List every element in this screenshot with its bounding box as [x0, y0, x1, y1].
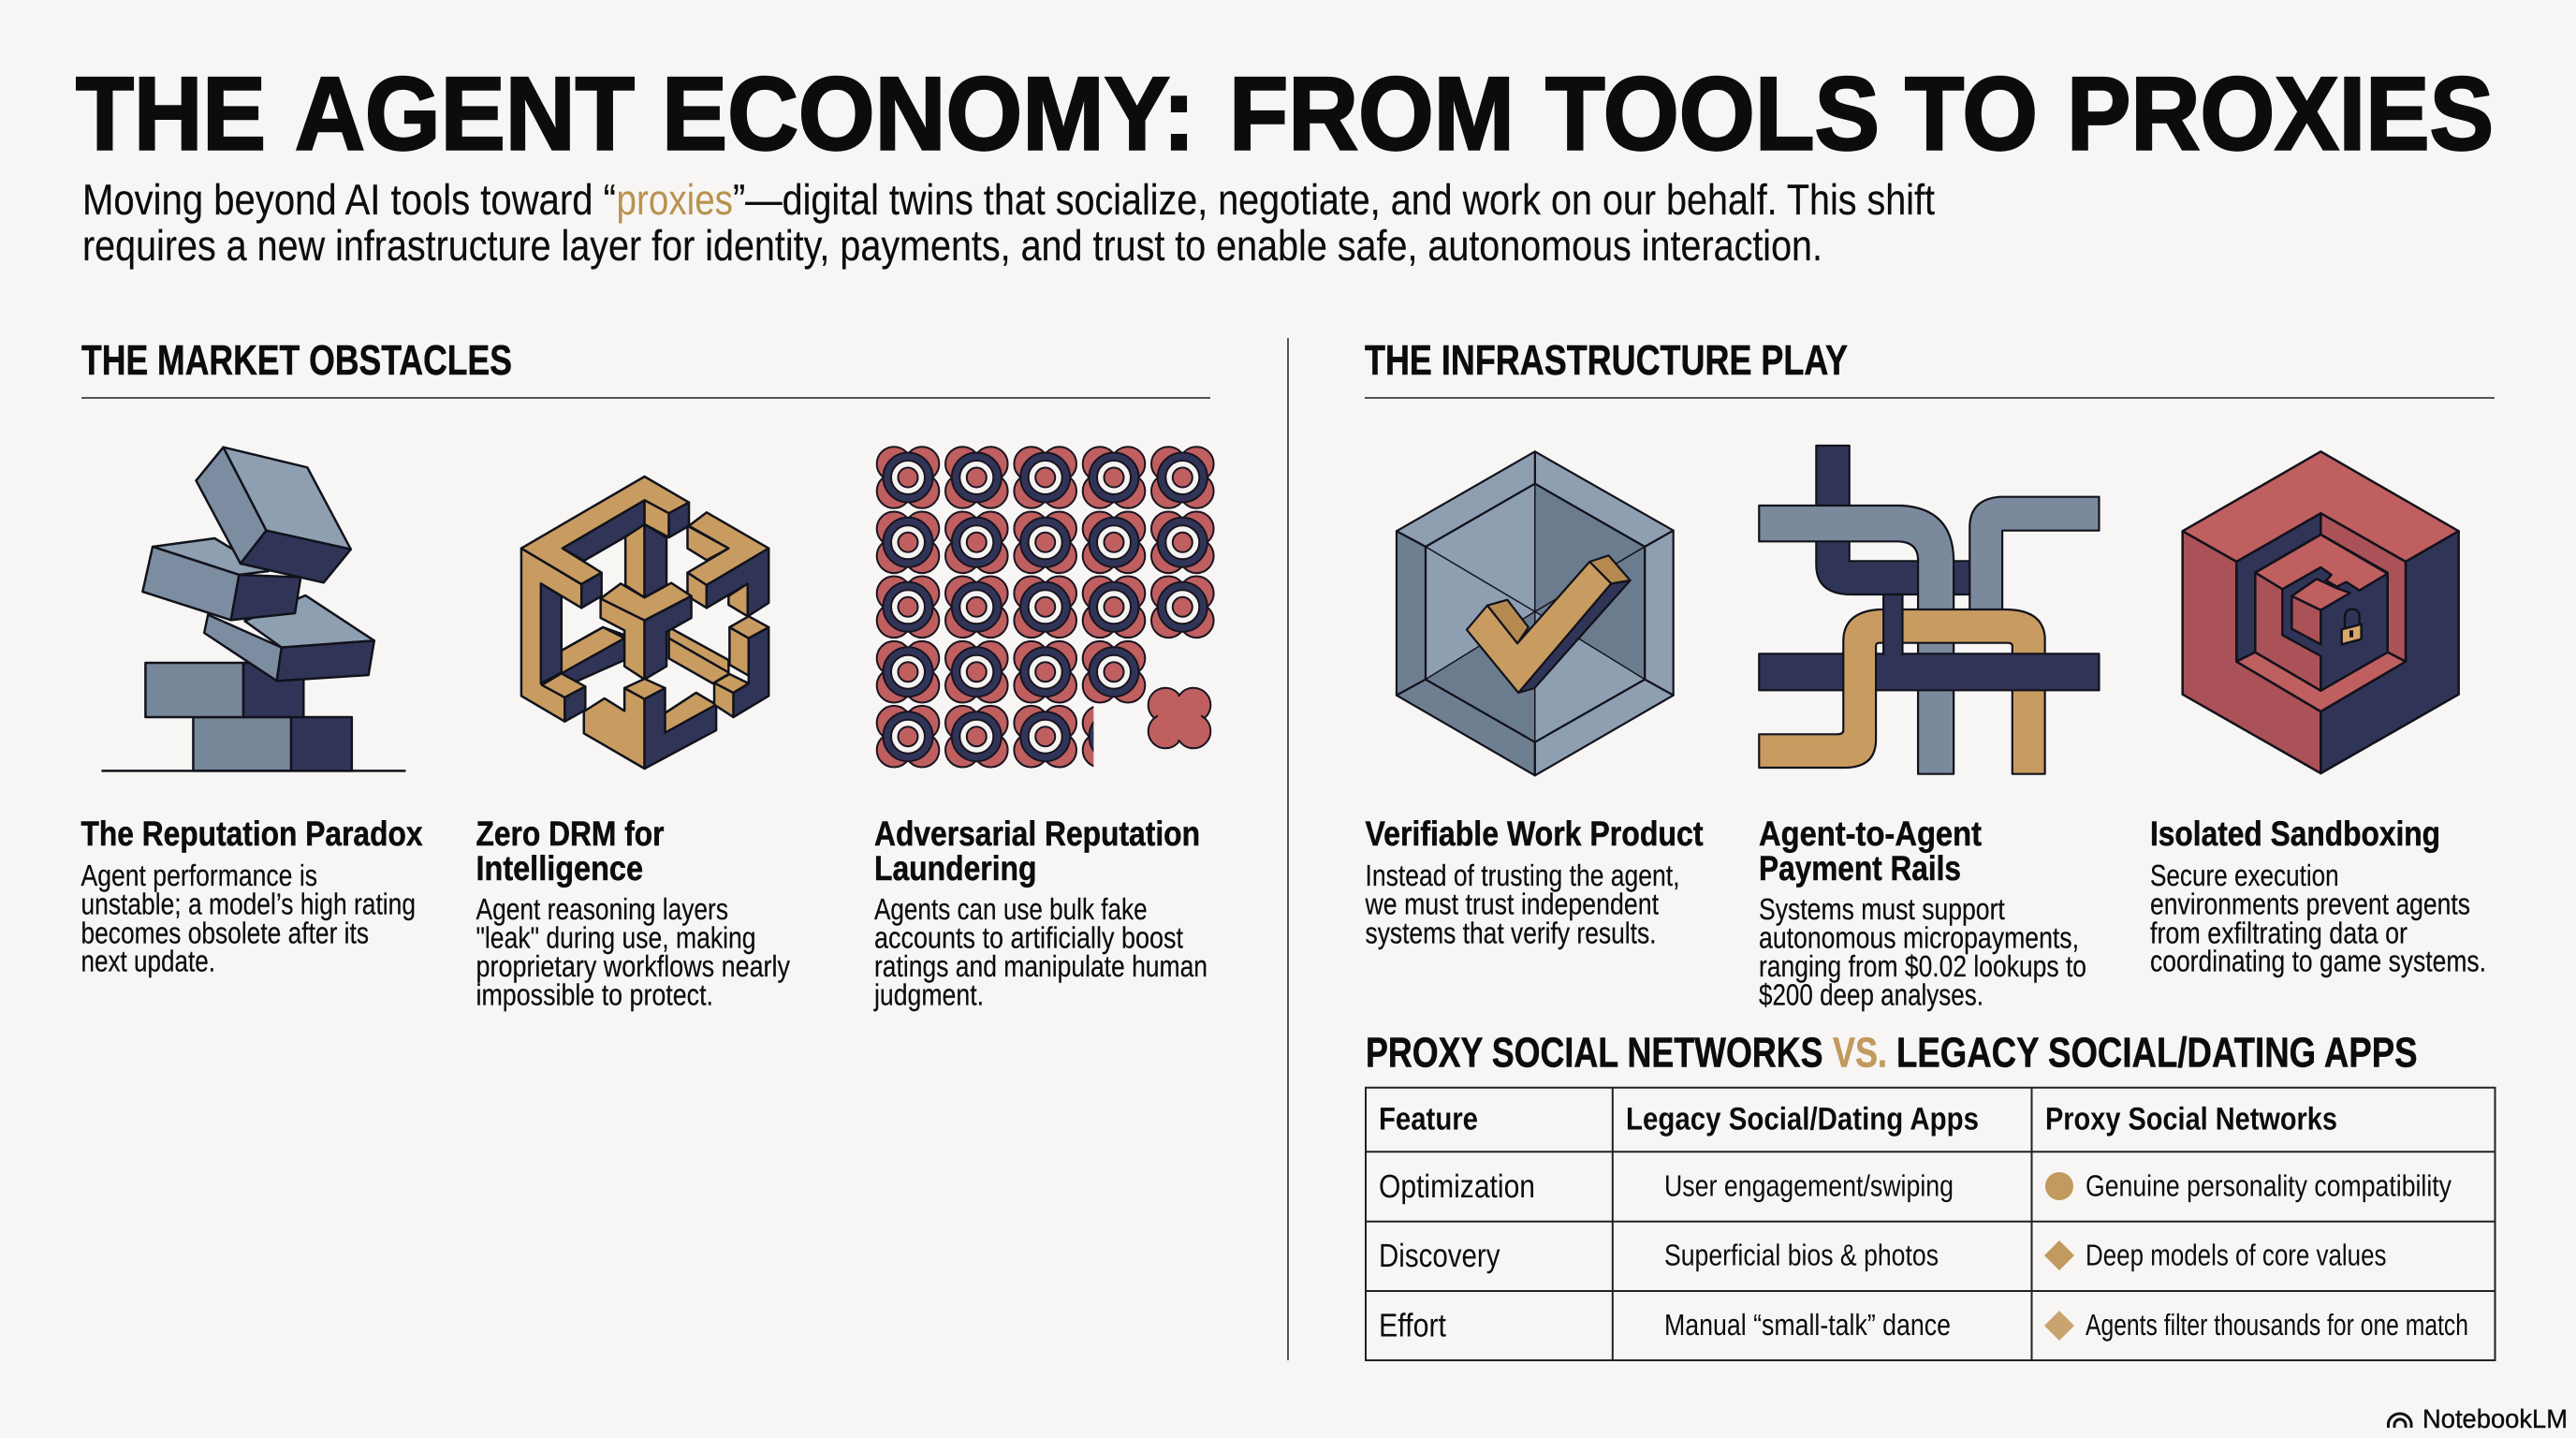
card: verifiable work product: Instead of trusting the agent, [1365, 858, 1679, 892]
icon: impossible cube [521, 477, 768, 769]
card: agent-to-agent payment rails: ranging from $0.02 lookups to [1759, 949, 2086, 983]
card: isolated sandboxing: Isolated Sandboxing [2150, 814, 2440, 853]
card: adversarial reputation laundering: judgment. [873, 977, 984, 1011]
table header row: Feature [1379, 1102, 1478, 1137]
card: verifiable work product: we must trust independent [1365, 888, 1659, 921]
table row: discovery: Superficial bios & photos [1664, 1238, 1939, 1271]
card: the reputation paradox: Agent performance is [80, 858, 317, 892]
heading: proxy vs legacy [1366, 1028, 2418, 1076]
card: isolated sandboxing [2150, 814, 2486, 978]
card: agent-to-agent payment rails: Systems must support [1759, 892, 2005, 926]
icon: nested sandbox cube with lock [2183, 451, 2459, 773]
icon: interwoven payment rails [1759, 446, 2099, 774]
table header row [1379, 1102, 2337, 1137]
card: zero drm for intelligence: Intelligence [476, 849, 643, 888]
table row: optimization [1379, 1168, 2452, 1205]
card: verifiable work product [1365, 814, 1704, 950]
card: verifiable work product: systems that verify results. [1365, 917, 1657, 950]
table row: optimization: Optimization [1379, 1168, 1535, 1205]
title: FROM [1229, 56, 1515, 172]
table row: discovery: Discovery [1379, 1238, 1500, 1274]
card: agent-to-agent payment rails: Agent-to-Agent [1759, 814, 1982, 853]
title: TO [1905, 56, 2038, 172]
card: zero drm for intelligence: Zero DRM for [476, 814, 665, 853]
table row: effort [1379, 1307, 2468, 1344]
comparison table [1366, 1088, 2496, 1360]
title: ECONOMY: [662, 56, 1195, 172]
table row: optimization: Genuine personality compatibility [2086, 1168, 2452, 1202]
icon: tumbling block stack [101, 448, 405, 770]
icon: verified check in hexagon [1397, 451, 1674, 775]
table row: effort: Manual “small-talk” dance [1664, 1308, 1951, 1342]
intro text: ”—digital twins that socialize, negotiate, and work on our behalf. This shift [733, 175, 1935, 224]
card: agent-to-agent payment rails [1759, 814, 2086, 1011]
card: isolated sandboxing: from exfiltrating data or [2150, 917, 2408, 950]
card: the reputation paradox: becomes obsolete after its [80, 917, 369, 950]
table header row: Legacy Social/Dating Apps [1626, 1102, 1979, 1137]
intro text: Moving beyond AI tools toward “ [82, 175, 616, 224]
icon: grid of reputation flowers [877, 447, 1214, 768]
table row: effort: Effort [1379, 1307, 1446, 1344]
card: the reputation paradox: next update. [80, 945, 215, 978]
card: zero drm for intelligence: impossible to protect. [476, 977, 713, 1011]
card: agent-to-agent payment rails: autonomous micropayments, [1759, 921, 2079, 955]
heading: proxy vs legacy: PROXY SOCIAL NETWORKS [1366, 1028, 1823, 1076]
table row: optimization: User engagement/swiping [1664, 1168, 1954, 1202]
card: zero drm for intelligence: "leak" during use, making [476, 921, 756, 955]
table row: effort: Agents filter thousands for one match [2086, 1308, 2468, 1342]
title: PROXIES [2067, 56, 2494, 172]
table row: discovery: Deep models of core values [2086, 1238, 2387, 1271]
title [76, 56, 2494, 172]
intro text: requires a new infrastructure layer for identity, payments, and trust to enable safe, autonomous interaction. [82, 221, 1822, 270]
card: adversarial reputation laundering: Adversarial Reputation [874, 814, 1200, 853]
intro text [82, 175, 1935, 270]
card: verifiable work product: Verifiable Work Product [1365, 814, 1704, 853]
card: adversarial reputation laundering: accounts to artificially boost [874, 921, 1183, 955]
card: the reputation paradox: unstable; a model’s high rating [80, 888, 416, 921]
heading: proxy vs legacy: LEGACY SOCIAL/DATING APPS [1896, 1028, 2418, 1076]
card: the reputation paradox [80, 814, 423, 978]
heading: proxy vs legacy: VS. [1833, 1028, 1887, 1076]
card: zero drm for intelligence [476, 814, 790, 1011]
heading: the infrastructure play: THE INFRASTRUCTURE PLAY [1365, 336, 1848, 384]
card: the reputation paradox: The Reputation Paradox [80, 814, 423, 853]
notebooklm logo: NotebookLM [2422, 1404, 2568, 1433]
title: THE [76, 56, 266, 172]
title: TOOLS [1545, 56, 1880, 172]
heading: the market obstacles: THE MARKET OBSTACLES [81, 336, 512, 384]
card: adversarial reputation laundering: Laundering [874, 849, 1037, 888]
card: agent-to-agent payment rails: $200 deep analyses. [1759, 977, 1983, 1011]
title: AGENT [295, 56, 635, 172]
card: zero drm for intelligence: Agent reasoning layers [476, 892, 728, 926]
card: adversarial reputation laundering: Agents can use bulk fake [874, 892, 1148, 926]
card: zero drm for intelligence: proprietary workflows nearly [476, 949, 790, 983]
card: isolated sandboxing: environments prevent agents [2150, 888, 2470, 921]
card: adversarial reputation laundering [873, 814, 1208, 1011]
intro text: proxies [616, 175, 733, 224]
card: isolated sandboxing: coordinating to game systems. [2150, 945, 2486, 978]
table row: discovery [1379, 1238, 2387, 1274]
table grid [1366, 1088, 2496, 1360]
table header row: Proxy Social Networks [2045, 1102, 2337, 1137]
card: isolated sandboxing: Secure execution [2150, 858, 2339, 892]
card: adversarial reputation laundering: ratings and manipulate human [874, 949, 1208, 983]
card: agent-to-agent payment rails: Payment Rails [1759, 849, 1961, 888]
